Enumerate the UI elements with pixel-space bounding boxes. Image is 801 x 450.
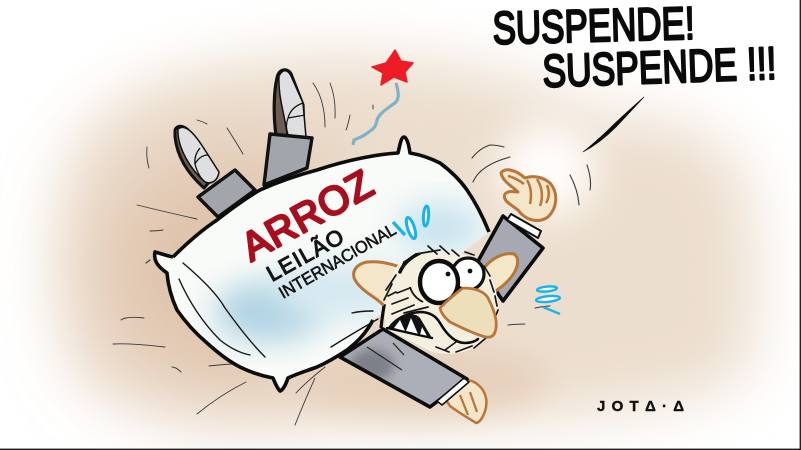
sack seam lines (179, 263, 378, 357)
sack label: INTERNACIONAL: INTERNACIONAL (276, 220, 399, 302)
sack label: ARROZ: ARROZ (234, 162, 380, 270)
icon: red star with blue tail (353, 50, 413, 145)
right ear (484, 254, 518, 292)
right eye (452, 258, 484, 290)
mouth and teeth (390, 312, 478, 343)
cheek line (410, 287, 423, 302)
left eye (420, 261, 458, 303)
icon: sweat drops above head (393, 206, 429, 240)
sack label: LEILÃO: LEILÃO (262, 224, 348, 286)
figure: raised arm and fist (477, 170, 556, 301)
face (385, 251, 498, 354)
hair and stubble (381, 246, 498, 352)
panel: rice sack (155, 137, 489, 391)
nose (440, 288, 496, 337)
speech line (583, 97, 644, 152)
left ear (354, 262, 402, 306)
heading: shouted speech (492, 0, 777, 97)
motion lines (113, 83, 591, 425)
icon: left leg and shoe (175, 126, 255, 217)
artist signature: JOTΔ·Δ (597, 398, 684, 415)
figure: lower arm and hand (340, 329, 486, 423)
figure: head (354, 246, 518, 354)
icon: sweat drops beside head (536, 286, 560, 314)
icon: right leg and shoe (264, 70, 312, 185)
